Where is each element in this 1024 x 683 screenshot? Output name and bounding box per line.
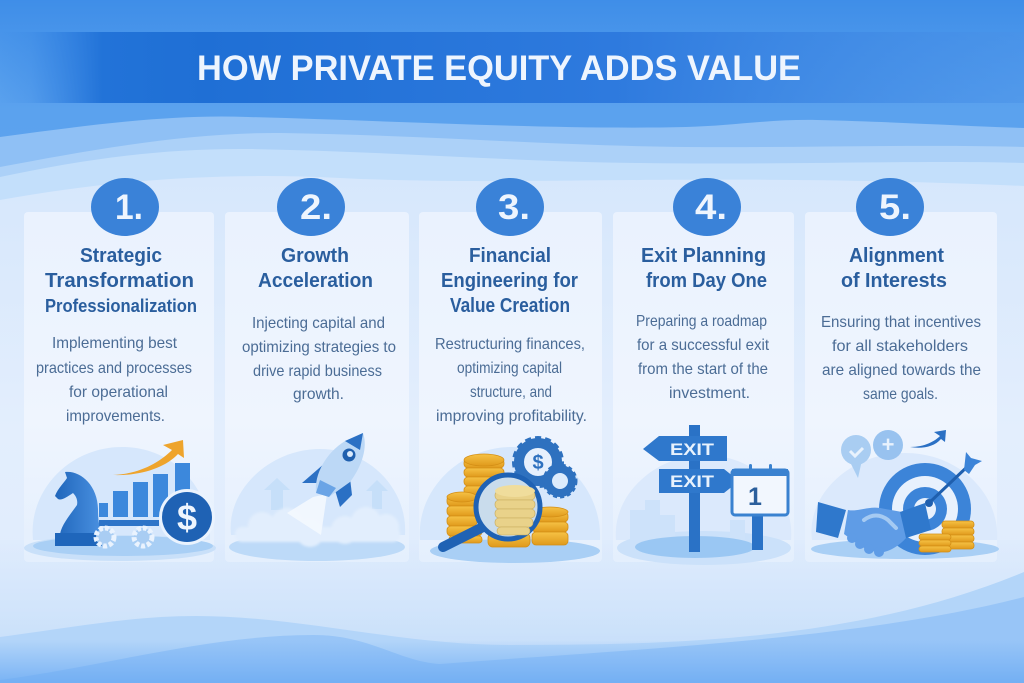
heading 3: Value Creation: [450, 295, 570, 317]
heading 2: Acceleration: [258, 270, 373, 292]
gear with dollar sign: $: [532, 452, 544, 474]
title banner: [0, 32, 1024, 103]
exit sign right: [659, 469, 739, 493]
description 5: [821, 314, 981, 403]
description 4: from the start of the: [638, 361, 768, 378]
calendar day one: 1: [748, 483, 762, 511]
heading 1: Transformation: [45, 270, 194, 292]
panel: step 4 exit planning: [613, 178, 794, 565]
description 3: structure, and: [470, 384, 552, 401]
exit sign left: [643, 436, 727, 461]
coins: [919, 521, 974, 552]
coin stacks: [447, 454, 568, 547]
heading 1: [45, 245, 197, 316]
icon: knight, bar chart, gears and dollar: $: [177, 497, 197, 538]
arrow in target: [925, 452, 982, 507]
icon: coins, magnifier and gears: [420, 438, 600, 563]
magnifier: [443, 475, 540, 547]
heading 3: Engineering for: [441, 270, 578, 292]
number badge 3: 3.: [498, 188, 530, 227]
description 4: Preparing a roadmap: [636, 313, 767, 330]
description 4: investment.: [669, 385, 750, 402]
icon: rocket launching from clouds: [229, 433, 405, 561]
heading 1: Professionalization: [45, 296, 197, 316]
description 3: [435, 336, 587, 425]
heading 2: Growth: [281, 245, 349, 267]
heading 1: Strategic: [80, 245, 162, 267]
description 3: improving profitability.: [436, 408, 587, 425]
heading 2: [258, 245, 373, 292]
calendar day one: [732, 464, 788, 550]
description 3: Restructuring finances,: [435, 336, 585, 353]
heading 5: Alignment: [849, 245, 944, 267]
description 4: for a successful exit: [637, 337, 770, 354]
description 2: Injecting capital and: [252, 315, 385, 332]
number badge 5: 5.: [879, 188, 911, 227]
small gear: [544, 465, 576, 497]
heading 4: from Day One: [646, 270, 767, 292]
description 1: improvements.: [66, 408, 165, 425]
description 2: growth.: [293, 386, 344, 403]
number badge 5: [856, 178, 924, 236]
description 5: same goals.: [863, 386, 938, 403]
title: HOW PRIVATE EQUITY ADDS VALUE: [197, 49, 801, 88]
number badge 2: 2.: [300, 188, 332, 227]
number badge 2: [277, 178, 345, 236]
gear with dollar sign: [514, 438, 562, 486]
heading 5: [841, 245, 947, 292]
speech bubbles: +: [882, 432, 894, 457]
heading 4: [641, 245, 767, 292]
heading 4: Exit Planning: [641, 245, 766, 267]
number badge 3: [476, 178, 544, 236]
description 5: for all stakeholders: [832, 338, 968, 355]
handshake: [816, 502, 931, 557]
heading 3: Financial: [469, 245, 551, 267]
panel: step 3 financial engineering: [419, 178, 602, 563]
exit sign left: EXIT: [670, 440, 715, 459]
panel: step 2 growth acceleration: [225, 178, 409, 562]
description 2: [242, 315, 396, 403]
heading 3: [441, 245, 578, 317]
heading 5: of Interests: [841, 270, 947, 292]
description 2: drive rapid business: [253, 363, 382, 380]
icon: knight, bar chart, gears and dollar: [24, 440, 216, 561]
description 1: practices and processes: [36, 360, 192, 377]
description 1: Implementing best: [52, 335, 178, 352]
description 1: for operational: [69, 384, 168, 401]
growth arrow: [910, 430, 946, 448]
description 3: optimizing capital: [457, 360, 562, 377]
speech bubbles: [841, 430, 903, 478]
description 2: optimizing strategies to: [242, 339, 396, 356]
number badge 4: 4.: [695, 188, 727, 227]
description 4: [636, 313, 770, 402]
number badge 1: [91, 178, 159, 236]
description 5: are aligned towards the: [822, 362, 981, 379]
panel: step 5 alignment of interests: [805, 178, 999, 562]
number badge 1: 1.: [115, 188, 143, 227]
number badge 4: [673, 178, 741, 236]
icon: handshake, target, coins: [811, 430, 999, 559]
description 1: [36, 335, 192, 425]
description 5: Ensuring that incentives: [821, 314, 981, 331]
exit sign right: EXIT: [670, 472, 715, 491]
target: [879, 463, 971, 555]
icon: exit signs and calendar: [616, 425, 791, 565]
panel: step 1 strategic transformation: [24, 178, 216, 562]
